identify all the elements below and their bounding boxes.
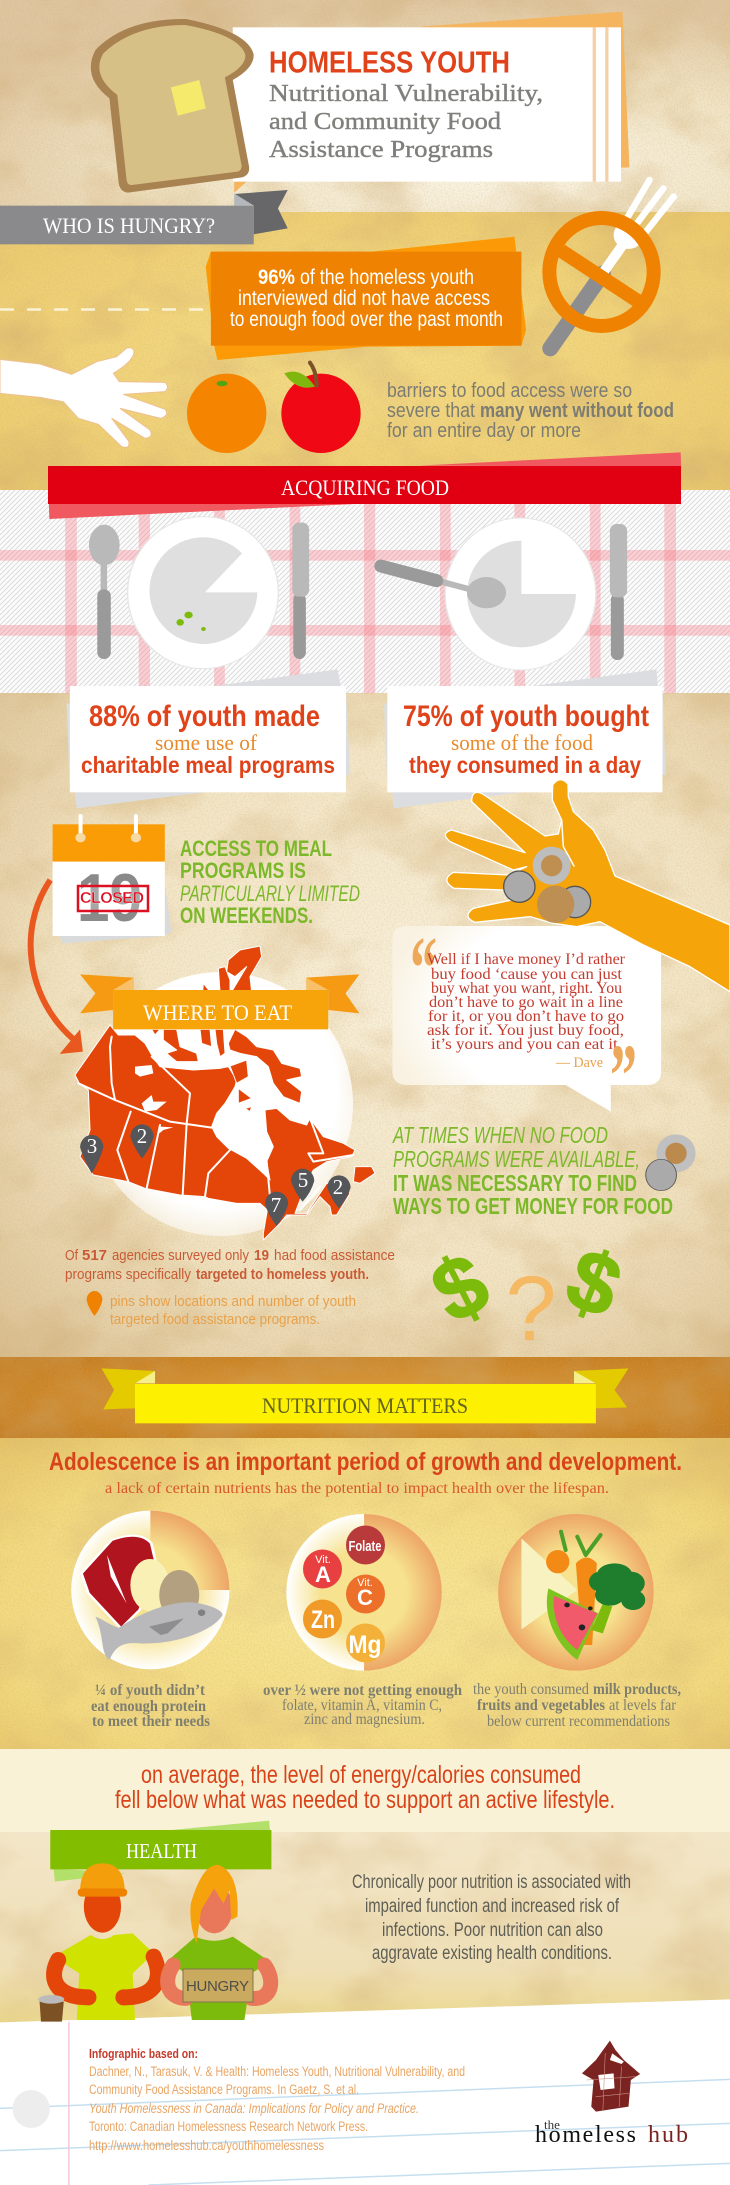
callout: quote from Dave: Well if I have money I’d rather bbox=[427, 951, 626, 968]
subtitle bbox=[269, 81, 543, 163]
legend: pins: pins show locations and number of youth bbox=[110, 1293, 356, 1310]
pin: Alberta 2: 2 bbox=[137, 1124, 147, 1148]
badge: zinc: Zn bbox=[311, 1606, 335, 1634]
pin: Alberta 2 bbox=[130, 1124, 154, 1158]
text: at times when no food programs: AT TIMES WHEN NO FOOD bbox=[392, 1122, 608, 1148]
text: access to meal programs: PROGRAMS IS bbox=[180, 858, 306, 883]
pin: Atlantic 2 bbox=[327, 1175, 351, 1208]
icon: watermelon bbox=[547, 1588, 598, 1660]
text: references bbox=[89, 2046, 465, 2153]
badge: magnesium bbox=[346, 1624, 385, 1662]
caption bbox=[473, 1681, 681, 1730]
caption: milk products, bbox=[593, 1681, 681, 1698]
card: 75 percent: they consumed in a day bbox=[409, 752, 641, 778]
panel: dairy fruit and vegetable plate bbox=[473, 1514, 681, 1730]
badge: vitamin C: Vit. bbox=[357, 1577, 373, 1589]
text: chronic poor nutrition bbox=[352, 1872, 631, 1964]
text: access to meal programs: ACCESS TO MEAL bbox=[180, 836, 332, 861]
dashed line bbox=[0, 308, 210, 311]
callout: quote from Dave: don’t have to go wait in a line bbox=[429, 994, 623, 1011]
pin: Quebec 5 bbox=[291, 1168, 314, 1202]
panel: tablecloth bbox=[0, 490, 730, 693]
icon: orange fruit bbox=[187, 374, 266, 453]
logo: the homeless hub bbox=[535, 2041, 688, 2148]
text: chronic poor nutrition: impaired function and increased risk of bbox=[365, 1896, 620, 1917]
text: 517 agencies surveyed: Of bbox=[65, 1247, 79, 1264]
text: access to meal programs bbox=[180, 836, 360, 928]
caption bbox=[91, 1682, 210, 1730]
icon: dollar question dollar: $ bbox=[554, 1230, 633, 1337]
callout: energy and calories bbox=[115, 1761, 615, 1814]
caption: to meet their needs bbox=[92, 1713, 210, 1730]
section ribbon: who is hungry: WHO IS HUNGRY? bbox=[43, 213, 215, 238]
callout: 96 percent: of the homeless youth bbox=[300, 266, 474, 289]
callout: quote from Dave: “ bbox=[410, 919, 437, 1019]
text: references: http://www.homelesshub.ca/youthhomelessness bbox=[89, 2138, 324, 2153]
text: 517 agencies surveyed: 517 bbox=[82, 1247, 107, 1264]
banner: acquiring food bbox=[48, 452, 681, 519]
card: 75 percent: some of the food bbox=[451, 730, 593, 755]
legend: pins: targeted food assistance programs. bbox=[110, 1311, 320, 1328]
legend: pins bbox=[87, 1291, 356, 1328]
icon: carrots bbox=[546, 1532, 601, 1645]
callout: 96 percent: 96% bbox=[258, 266, 295, 289]
caption bbox=[263, 1682, 462, 1728]
icon: broccoli bbox=[589, 1563, 645, 1633]
callout: quote from Dave: buy what you want, right. You bbox=[431, 980, 622, 997]
badge: magnesium: Mg bbox=[348, 1631, 382, 1659]
icon: puzzle house bbox=[582, 2041, 640, 2112]
banner: health bbox=[50, 1821, 271, 1882]
callout: quote from Dave: ask for it. You just buy food, bbox=[427, 1022, 624, 1039]
caption: over ½ were not getting enough bbox=[263, 1682, 462, 1699]
text: access to meal programs: ON WEEKENDS. bbox=[180, 903, 313, 928]
illustration: first place setting bbox=[89, 517, 309, 669]
icon: spoon on plate bbox=[381, 566, 506, 608]
icon: knife bbox=[292, 523, 309, 659]
icon: fish bbox=[95, 1602, 223, 1660]
icon: reaching white hand bbox=[0, 348, 167, 447]
section ribbon: who is hungry bbox=[0, 190, 288, 244]
icon: toast with butter bbox=[91, 19, 254, 193]
card: 75 percent: 75% of youth bought bbox=[403, 700, 649, 733]
subtitle: Assistance Programs bbox=[269, 137, 493, 163]
callout: quote from Dave: — Dave bbox=[555, 1055, 603, 1071]
plate bbox=[71, 1511, 230, 1669]
plate bbox=[498, 1514, 654, 1671]
pin: Quebec 5: 5 bbox=[298, 1168, 308, 1192]
subtitle: and Community Food bbox=[269, 109, 501, 135]
logo: the homeless hub: homeless bbox=[535, 2122, 636, 2148]
banner: where to eat bbox=[80, 974, 359, 1029]
caption: the youth consumed bbox=[473, 1681, 589, 1698]
text: 517 agencies surveyed: targeted to homeless youth. bbox=[196, 1266, 369, 1283]
icon: plate with leftovers bbox=[128, 517, 278, 669]
callout: energy and calories: fell below what was needed to support an active lifestyle. bbox=[115, 1786, 615, 1814]
sign: hungry: HUNGRY bbox=[186, 1978, 249, 1995]
icon: spoon bbox=[89, 525, 120, 659]
subheading: lack of nutrients: a lack of certain nutrients has the potential to impact health over the lifespan. bbox=[105, 1480, 609, 1497]
text: at times when no food programs bbox=[392, 1122, 673, 1219]
badge: vitamin C bbox=[346, 1574, 385, 1614]
callout: energy and calories: on average, the level of energy/calories consumed bbox=[141, 1761, 581, 1789]
card: 75 percent bbox=[384, 669, 666, 808]
text: chronic poor nutrition: Chronically poor nutrition is associated with bbox=[352, 1872, 631, 1893]
callout: quote from Dave: for it, or you don’t have to go bbox=[428, 1008, 624, 1025]
panel: title card bbox=[233, 12, 629, 193]
logo: the homeless hub: the bbox=[544, 2117, 560, 2132]
icon: red apple bbox=[281, 363, 361, 453]
callout: quote from Dave: ” bbox=[610, 1027, 637, 1127]
text: barriers to food access: barriers to food access were so bbox=[387, 380, 632, 402]
icon: dollar question dollar: ? bbox=[505, 1258, 557, 1360]
text: references: Youth Homelessness in Canada: Implications for Policy and Practice. bbox=[89, 2101, 419, 2116]
arrow: calendar to map bbox=[31, 880, 83, 1054]
caption: ¼ of youth didn’t bbox=[95, 1682, 206, 1699]
text: 517 agencies surveyed bbox=[65, 1247, 395, 1283]
banner: acquiring food: ACQUIRING FOOD bbox=[281, 475, 449, 500]
text: references: Infographic based on: bbox=[89, 2046, 198, 2061]
text: barriers to food access bbox=[387, 380, 674, 442]
text: references: Community Food Assistance Programs. In Gaetz, S. et al. bbox=[89, 2082, 359, 2097]
illustration: second place setting bbox=[381, 518, 627, 670]
text: 517 agencies surveyed: had food assistance bbox=[274, 1247, 395, 1264]
text: 517 agencies surveyed: 19 bbox=[254, 1247, 269, 1264]
caption: below current recommendations bbox=[487, 1713, 670, 1730]
badge: zinc bbox=[303, 1600, 342, 1638]
icon: steak bbox=[81, 1536, 156, 1628]
caption: folate, vitamin A, vitamin C, bbox=[282, 1697, 442, 1714]
pin: BC 3 bbox=[80, 1134, 103, 1173]
banner: nutrition matters: NUTRITION MATTERS bbox=[262, 1393, 468, 1418]
callout: 96 percent: to enough food over the past month bbox=[230, 308, 503, 331]
callout: quote from Dave: buy food ‘cause you can just bbox=[431, 966, 623, 983]
text: 517 agencies surveyed: agencies surveyed only bbox=[112, 1247, 249, 1264]
pin: Ontario 7: 7 bbox=[271, 1193, 281, 1217]
text: barriers to food access: many went without food bbox=[480, 400, 674, 422]
caption: at levels far bbox=[609, 1697, 677, 1714]
sign: hungry bbox=[183, 1969, 253, 2002]
card: 88 percent bbox=[67, 669, 350, 808]
card: 88 percent: some use of bbox=[155, 730, 258, 755]
icon: no fork bbox=[549, 180, 674, 348]
footer: notebook paper bbox=[0, 1999, 730, 2185]
text: 517 agencies surveyed: programs specifically bbox=[65, 1266, 191, 1283]
icon: coffee cup bbox=[38, 1995, 64, 2022]
icon: closed calendar: CLOSED bbox=[80, 890, 144, 907]
text: barriers to food access: for an entire day or more bbox=[387, 420, 581, 442]
icon: dollar question dollar: $ bbox=[417, 1235, 504, 1342]
icon: closed calendar bbox=[53, 816, 171, 943]
man bbox=[54, 1863, 158, 2020]
banner: nutrition matters bbox=[101, 1368, 629, 1423]
pin: Ontario 7 bbox=[265, 1192, 288, 1226]
text: barriers to food access: severe that bbox=[387, 400, 475, 422]
subtitle: Nutritional Vulnerability, bbox=[269, 81, 543, 107]
badge: vitamin A: Vit. bbox=[315, 1554, 331, 1566]
woman bbox=[167, 1865, 271, 2020]
text: references: Dachner, N., Tarasuk, V. & Health: Homeless Youth, Nutritional Vulnerability, and bbox=[89, 2064, 465, 2079]
icon: cheese wedge bbox=[521, 1538, 577, 1629]
callout: quote from Dave bbox=[392, 919, 661, 1127]
caption: eat enough protein bbox=[91, 1698, 206, 1715]
plate bbox=[286, 1514, 442, 1671]
heading: title: HOMELESS YOUTH bbox=[269, 44, 510, 80]
logo: the homeless hub: hub bbox=[648, 2122, 688, 2148]
caption: fruits and vegetables bbox=[477, 1697, 605, 1714]
badge: folate bbox=[346, 1526, 385, 1564]
callout: 96 percent bbox=[206, 237, 526, 360]
icon: knife bbox=[610, 524, 627, 660]
icon: plate bbox=[445, 518, 596, 670]
panel: protein plate bbox=[71, 1511, 230, 1730]
card: 88 percent: 88% of youth made bbox=[89, 700, 320, 733]
text: references: Toronto: Canadian Homelessness Research Network Press. bbox=[89, 2119, 368, 2134]
callout: 96 percent: interviewed did not have access bbox=[238, 287, 490, 310]
text: chronic poor nutrition: aggravate existing health conditions. bbox=[372, 1943, 612, 1964]
icon: dollar question dollar bbox=[417, 1230, 633, 1360]
pin: Atlantic 2: 2 bbox=[333, 1175, 343, 1199]
icon: cheese and egg bbox=[130, 1559, 199, 1620]
text: chronic poor nutrition: infections. Poor nutrition can also bbox=[382, 1920, 603, 1941]
card: 88 percent: charitable meal programs bbox=[81, 752, 335, 778]
pin: BC 3: 3 bbox=[87, 1134, 97, 1158]
badge: vitamin A: A bbox=[315, 1562, 331, 1587]
badge: folate: Folate bbox=[348, 1538, 382, 1555]
banner: where to eat: WHERE TO EAT bbox=[143, 1000, 293, 1025]
illustration: two hungry youth bbox=[38, 1821, 271, 2022]
icon: orange hand holding coins bbox=[445, 780, 730, 992]
map: Canada with pins bbox=[75, 946, 375, 1240]
text: at times when no food programs: IT WAS NECESSARY TO FIND bbox=[393, 1170, 637, 1196]
banner: health: HEALTH bbox=[126, 1839, 197, 1863]
text: access to meal programs: PARTICULARLY LIMITED bbox=[180, 881, 360, 906]
badge: vitamin C: C bbox=[357, 1585, 373, 1610]
panel: micronutrient plate bbox=[263, 1514, 462, 1728]
callout: quote from Dave: it’s yours and you can eat it. bbox=[431, 1036, 622, 1053]
icon: closed calendar: 19 bbox=[77, 860, 142, 936]
text: at times when no food programs: PROGRAMS WERE AVAILABLE, bbox=[393, 1146, 640, 1172]
badge: vitamin A bbox=[303, 1550, 342, 1588]
caption: zinc and magnesium. bbox=[304, 1711, 425, 1728]
icon: coins bbox=[646, 1134, 696, 1191]
